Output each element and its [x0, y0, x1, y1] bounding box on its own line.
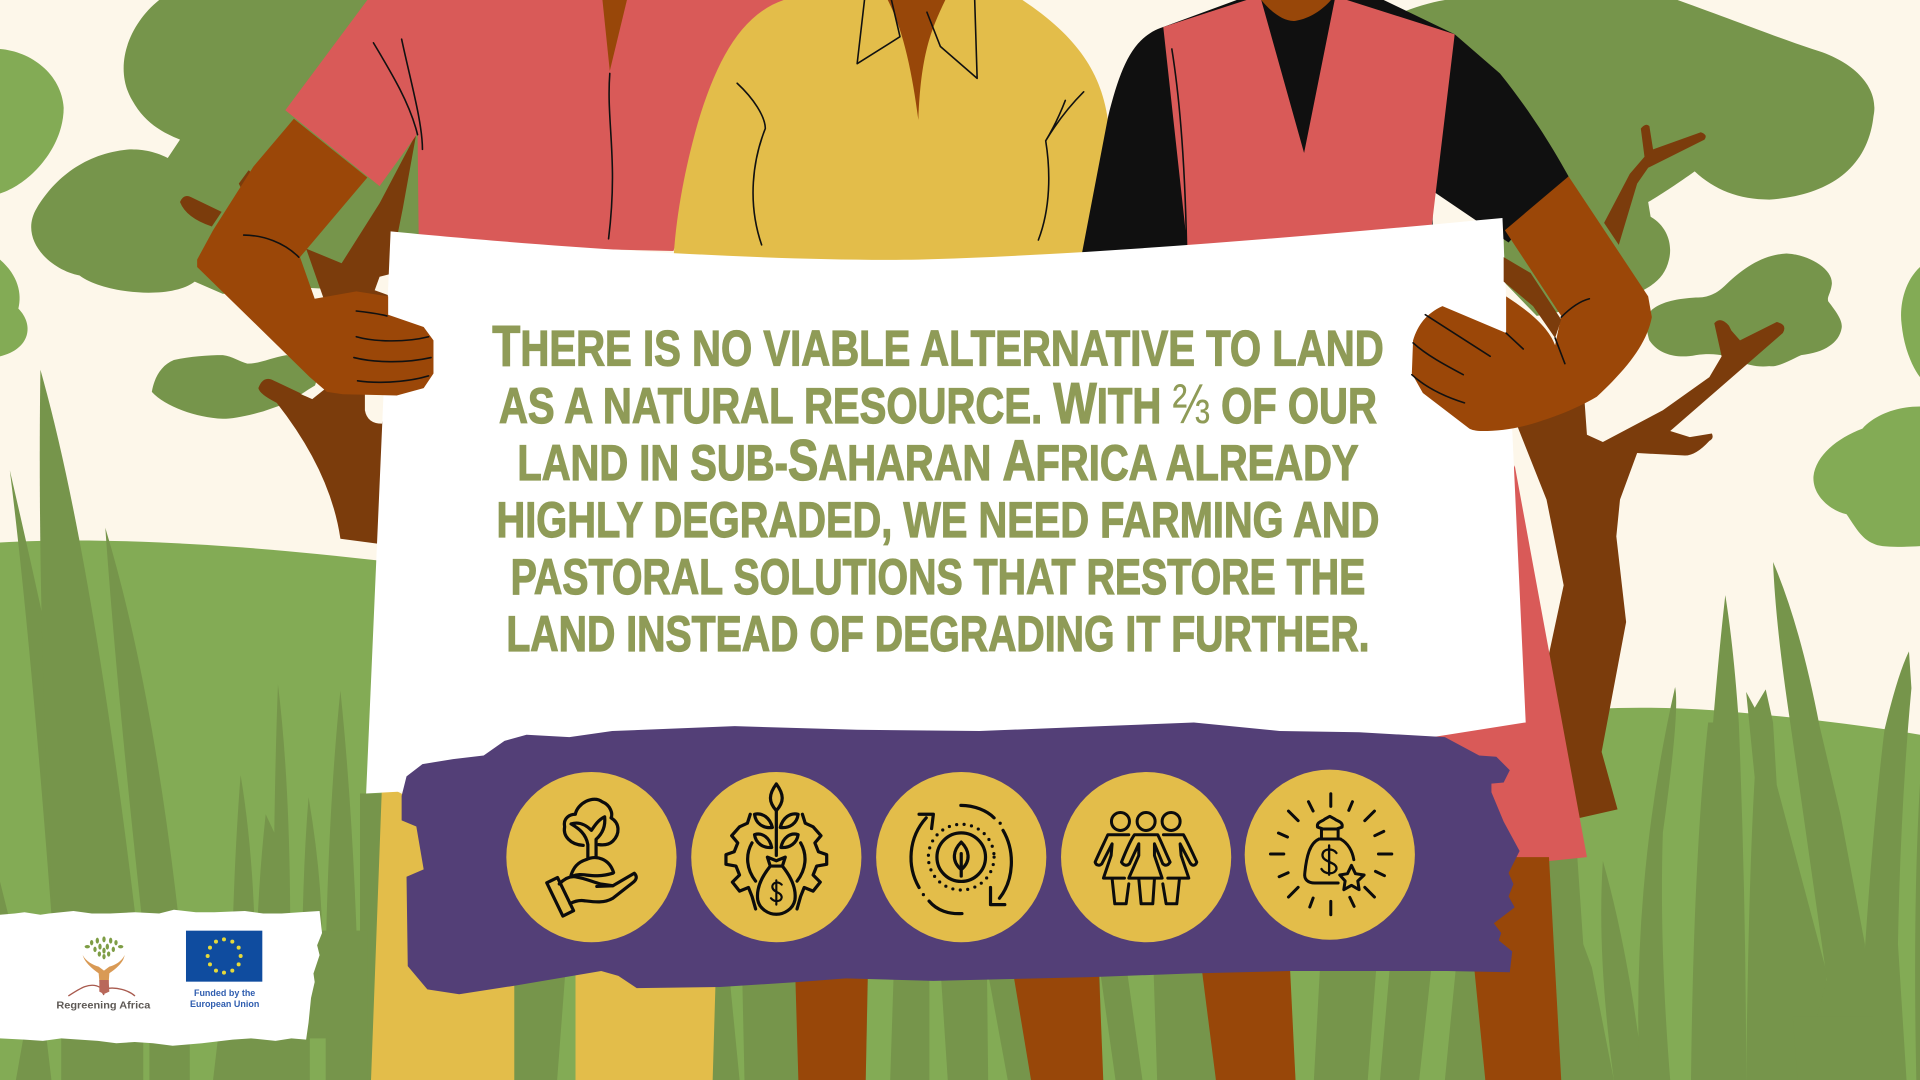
logo text: Regreening Africa: Regreening Africa — [56, 1001, 151, 1012]
quote text: AS A NATURAL RESOURCE. WITH ⅔ OF OUR — [499, 372, 1377, 436]
purple brush strip — [402, 722, 1520, 994]
quote text: LAND INSTEAD OF DEGRADING IT FURTHER. — [506, 606, 1370, 662]
icon: hand holding seedling — [506, 772, 677, 942]
icon: gear with plant and money bag — [691, 772, 861, 942]
logo text: Funded by the European Union: Funded by the — [194, 988, 255, 998]
tree trunks — [180, 133, 416, 545]
sign: white board — [366, 218, 1526, 793]
person: right figure — [1081, 0, 1587, 1080]
hill right — [1555, 708, 1920, 1080]
icon: three women — [1061, 772, 1231, 942]
quote text — [492, 315, 1384, 662]
icon: money bag with star and rays — [1245, 770, 1415, 940]
person: middle figure — [673, 0, 1108, 1080]
logo strip: torn paper with logos — [0, 910, 322, 1046]
logo: Regreening Africa tree — [68, 936, 135, 996]
quote text: HIGHLY DEGRADED, WE NEED FARMING AND — [497, 492, 1379, 548]
tree trunk: right — [1513, 125, 1784, 818]
logo text: Funded by the European Union: European Union — [190, 999, 259, 1009]
tree canopies — [0, 0, 1920, 547]
icon: circular arrows around leaf — [876, 772, 1046, 942]
hill left — [0, 540, 392, 1080]
arms and hands over sign — [197, 119, 1652, 431]
quote text: THERE IS NO VIABLE ALTERNATIVE TO LAND — [492, 315, 1384, 379]
logo: EU flag — [186, 931, 262, 982]
logo text: Funded by the European Union — [190, 988, 259, 1009]
grass blades — [0, 370, 1920, 1080]
quote text: LAND IN SUB-SAHARAN AFRICA ALREADY — [517, 429, 1359, 493]
quote text: PASTORAL SOLUTIONS THAT RESTORE THE — [511, 549, 1365, 605]
person: left figure — [285, 0, 868, 1080]
